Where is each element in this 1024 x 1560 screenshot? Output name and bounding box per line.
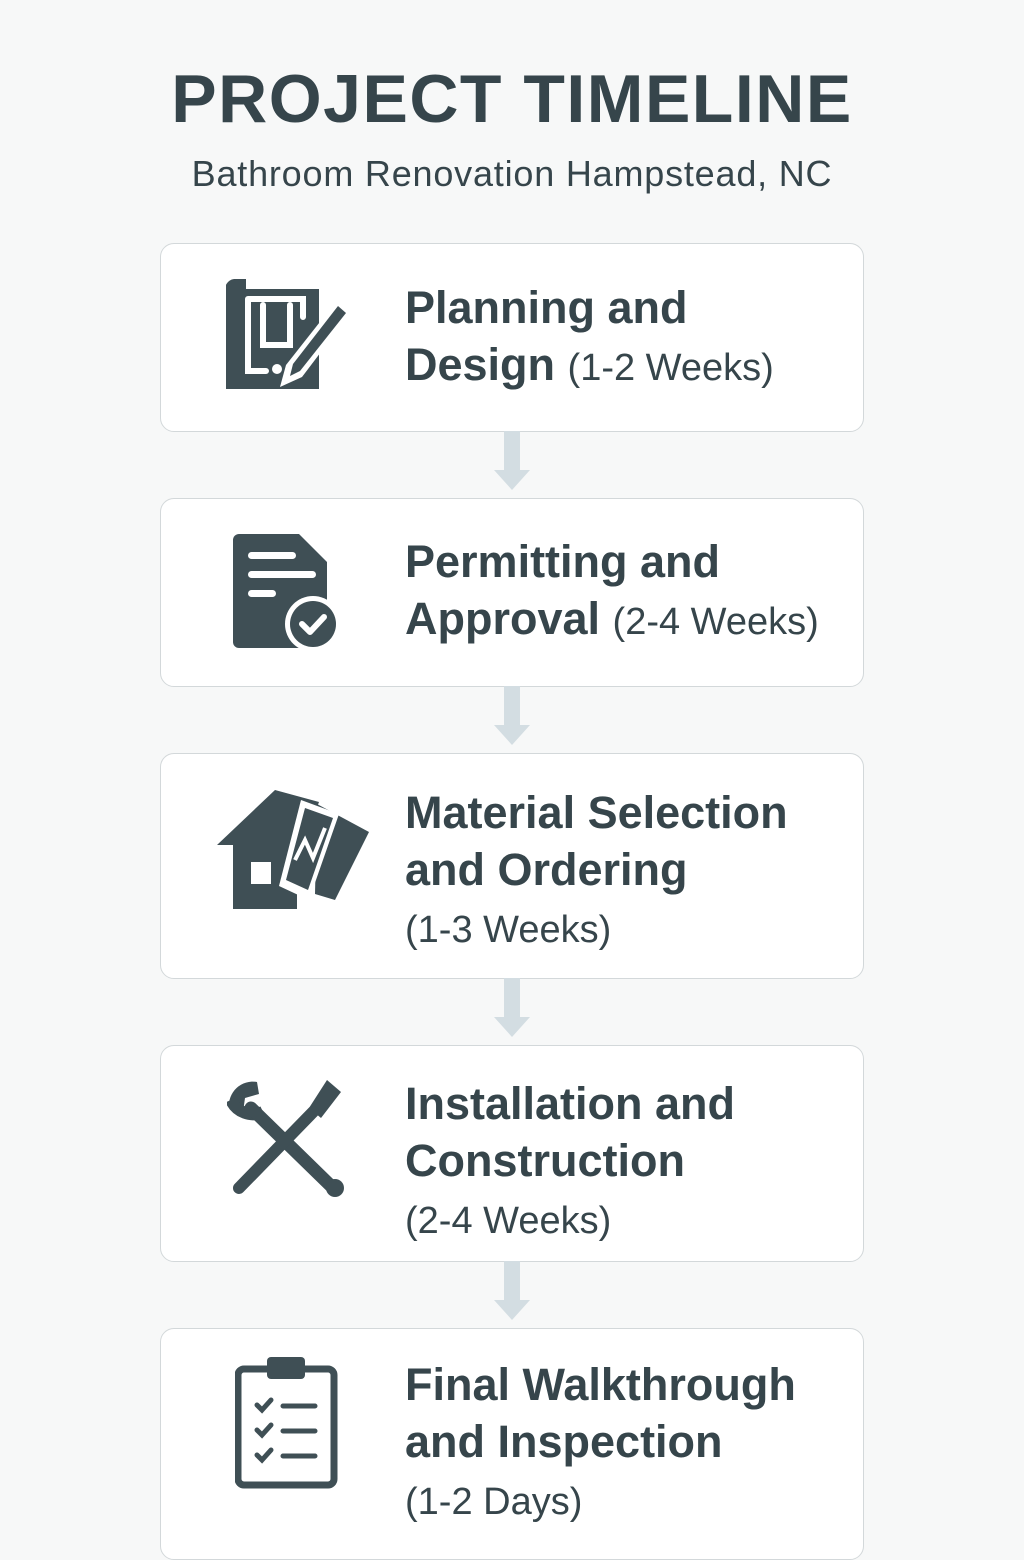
heading: (1-3 Weeks) bbox=[405, 909, 611, 951]
icon: document with check bbox=[233, 534, 336, 648]
icon: wrench and screwdriver bbox=[227, 1080, 344, 1197]
heading: and Inspection bbox=[405, 1416, 723, 1467]
heading bbox=[405, 282, 774, 390]
subtitle: Bathroom Renovation Hampstead, NC bbox=[192, 153, 832, 194]
heading: (1-2 Days) bbox=[405, 1481, 582, 1523]
heading: Permitting and bbox=[405, 536, 720, 587]
heading bbox=[405, 1359, 796, 1523]
heading: Material Selection bbox=[405, 787, 788, 838]
heading: Construction bbox=[405, 1135, 685, 1186]
arrow bbox=[494, 1262, 530, 1320]
heading bbox=[405, 1078, 735, 1242]
title: PROJECT TIMELINE bbox=[171, 61, 853, 137]
heading bbox=[405, 787, 788, 951]
heading: Installation and bbox=[405, 1078, 735, 1129]
panel: planning and design bbox=[160, 243, 864, 432]
icon: blueprint and pencil bbox=[226, 279, 346, 389]
heading: and Ordering bbox=[405, 844, 688, 895]
heading: (2-4 Weeks) bbox=[405, 1200, 611, 1242]
panel: material selection bbox=[160, 753, 864, 979]
icon: house with samples bbox=[217, 790, 369, 909]
icon: clipboard checklist bbox=[235, 1357, 338, 1488]
heading: Approval (2-4 Weeks) bbox=[405, 593, 819, 644]
panel: final walkthrough bbox=[160, 1328, 864, 1560]
arrow bbox=[494, 687, 530, 745]
arrow bbox=[494, 979, 530, 1037]
heading bbox=[405, 536, 819, 644]
heading: Final Walkthrough bbox=[405, 1359, 796, 1410]
heading: Design (1-2 Weeks) bbox=[405, 339, 774, 390]
heading: Planning and bbox=[405, 282, 688, 333]
arrow bbox=[494, 432, 530, 490]
panel: permitting and approval bbox=[160, 498, 864, 687]
panel: installation bbox=[160, 1045, 864, 1262]
